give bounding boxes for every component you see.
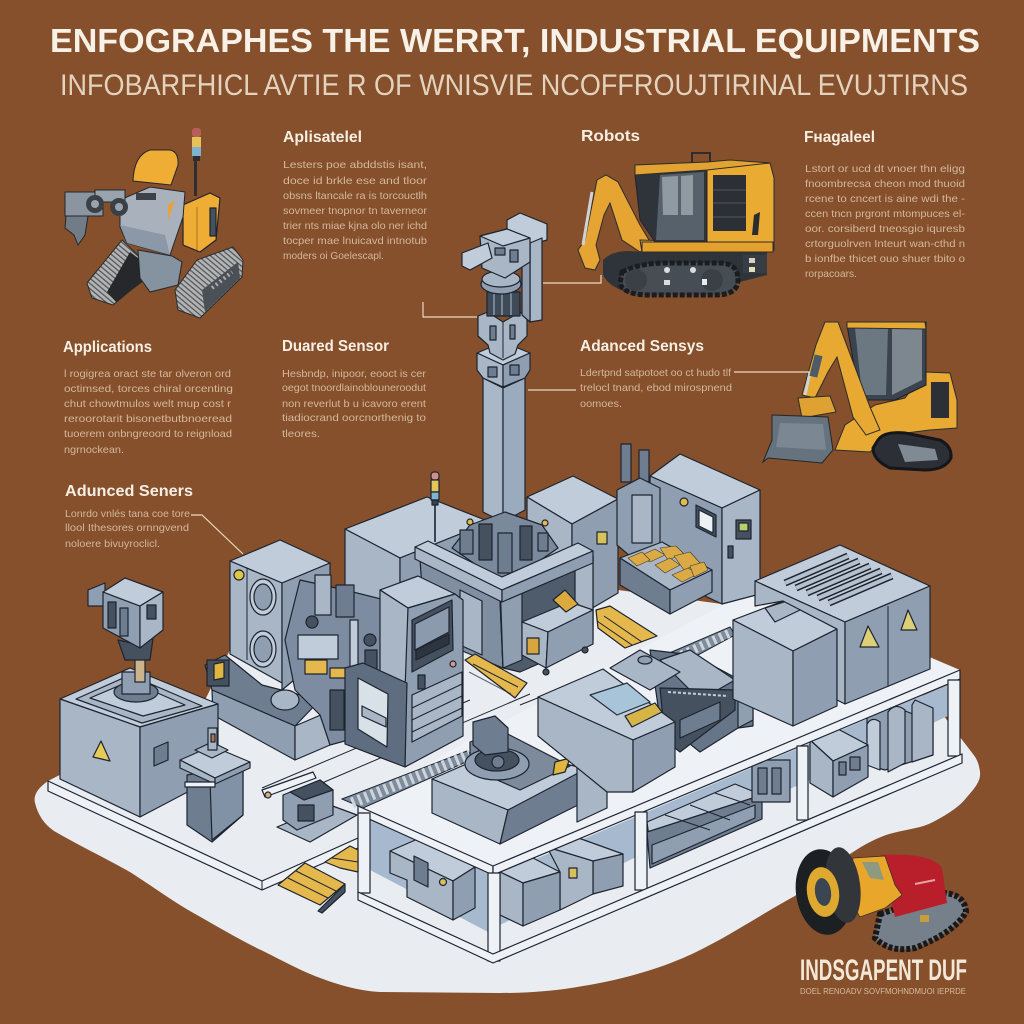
- text block: Fnagaleel: rcene to cncert is aine wdi the -: [805, 193, 966, 205]
- text block: Aplisatelel: sovmeer tnopnor tn taverneor: [283, 205, 428, 217]
- yellow ramp: [465, 654, 527, 698]
- post: [358, 813, 370, 893]
- text block: Fnagaleel: rorpacoars.: [805, 268, 857, 280]
- text block: Applications: tuoerem onbngreoord to reignload: [64, 428, 232, 440]
- text block: Duared Sensor: oegot tnoordlainoblouneroodut: [282, 382, 426, 394]
- footer label: DOEL RENOADV SOVFMOHNDMUOI IEPRDE: [800, 987, 966, 996]
- frame top: [415, 541, 593, 590]
- lower left platform: [48, 622, 727, 890]
- text block: Applications: Applications: [63, 339, 152, 356]
- tall column: [483, 378, 525, 522]
- title: ENFOGRAPHES THE WERRT, INDUSTRIAL EQUIPMENTS: [50, 22, 980, 59]
- top mechanisms on frame: [452, 512, 558, 585]
- text block: Advanced Sensers: noloere bivuyroclicl.: [65, 538, 160, 550]
- text block: Aplisatelel: tocper mae lnuicavd intnotub: [283, 235, 427, 247]
- screen machine: [538, 650, 680, 792]
- yellow chassis: [850, 856, 902, 917]
- white factory floor: [35, 590, 980, 993]
- text block: Adanced Sensys: oomoes.: [580, 398, 622, 410]
- under-deck back wall right: [500, 684, 950, 925]
- signal tower: [431, 472, 439, 542]
- right box with bars and warning triangles: [755, 545, 930, 704]
- warning box: [60, 668, 218, 817]
- rotary mechanism: [481, 271, 521, 316]
- text block: Advanced Sensers: Adunced Seners: [65, 483, 193, 500]
- yellow pack: [183, 193, 220, 252]
- text block: Fnagaleel: Lstort or ucd dt vnoer thn eligg: [805, 163, 965, 175]
- text block: Duared Sensor: [282, 338, 427, 440]
- center tower machine: [415, 213, 593, 675]
- red hood: [880, 855, 947, 917]
- bottom left machine: warning box and spindle: [60, 578, 218, 817]
- right tall cabinet: [650, 454, 760, 604]
- ground base front rail: [358, 754, 962, 963]
- text block: Aplisatelel: trier nts miae kjna olo ner ichd: [283, 220, 427, 232]
- text block: Duared Sensor: Hesbndp, inipoor, eooct is cer: [282, 368, 427, 380]
- text block: Duared Sensor: tiadiocrand oorcnorthenig to: [282, 412, 426, 424]
- text block: Aplisatelel: obsns ltancale ra is torcouctlh: [283, 190, 427, 202]
- frame leg: [500, 570, 522, 668]
- bucket: [763, 415, 833, 463]
- back right box: [527, 476, 618, 620]
- text block: Fnagaleel: ccen tncn prgront mtompuces el-: [805, 208, 966, 220]
- text block: Applications: l rogigrea oract ste tar olveron ord: [64, 368, 231, 380]
- text block: Applications: reroorotarit bisonetbutbnoeread: [64, 413, 232, 425]
- left track: [87, 240, 146, 305]
- text block: Duared Sensor: non reverlut b u icavoro erent: [282, 398, 426, 410]
- rear body: [640, 163, 774, 252]
- small robot on conveyor: [262, 772, 357, 842]
- vehicle track: [875, 893, 966, 949]
- frame left panel: [420, 560, 503, 668]
- cabinet with round gauges: [230, 540, 330, 690]
- text block: Adanced Sensys: Adanced Sensys: [580, 338, 704, 355]
- text block: Fnagaleel: fnoombrecsa cheon mod thuoid: [805, 178, 965, 190]
- yellow stairs lower: [278, 863, 345, 913]
- signal pole: [192, 128, 201, 196]
- upper block: [478, 312, 527, 360]
- footer label: [800, 954, 967, 996]
- boxes under deck right: [810, 700, 933, 797]
- text block: Duared Sensor: tleores.: [282, 428, 320, 440]
- text block: Aplisatelel: Lesters poe abddstis isant,: [283, 159, 427, 171]
- conveyor belt left: [342, 751, 475, 808]
- conveyor belt right: [667, 627, 735, 663]
- text block: Aplisatelel: doce id brkle ese and tloor: [283, 175, 428, 187]
- left bench machine: [205, 655, 330, 760]
- text block: Adanced Sensys: Ldertpnd satpotoet oo ct hudo tlf: [580, 367, 731, 379]
- control cabinet: [345, 576, 463, 767]
- rear conveyor machine: [650, 650, 753, 752]
- box row under deck: [500, 836, 623, 926]
- post: [488, 873, 500, 961]
- excavator top: [578, 153, 774, 295]
- boom: [802, 322, 880, 435]
- frame right panel: [500, 556, 593, 672]
- yellow ramp right: [596, 606, 657, 648]
- spindle head: [88, 578, 163, 702]
- callout lines: [191, 275, 810, 554]
- text block: Fnagaleel: crtorguolrven Inteurt wan-cthd n: [805, 238, 965, 250]
- column cap: [477, 342, 530, 387]
- post: [948, 680, 960, 756]
- text block: Fnagaleel: Fнаgaleel: [804, 129, 875, 146]
- cab: [847, 322, 926, 400]
- torso: [120, 187, 185, 255]
- text block: Aplisatelel: moders oi Goelescapl.: [283, 250, 384, 262]
- crawler track: [620, 263, 738, 295]
- text block: Fnagaleel: [804, 129, 966, 280]
- text block: Applications: octimsed, torces chiral orcenting: [64, 383, 233, 395]
- arm: [578, 175, 652, 270]
- deck and posts: [358, 585, 962, 963]
- text block: Adanced Sensys: [580, 338, 732, 410]
- under-deck back wall: [370, 815, 488, 932]
- cab: [635, 168, 707, 242]
- right track: [175, 247, 243, 318]
- vents: [713, 175, 746, 231]
- text block: Aplisatelel: Aplisatelel: [283, 129, 362, 146]
- post: [635, 812, 647, 890]
- dense mechanism with yellow parts: [285, 575, 385, 745]
- small pedestal machine: [180, 728, 250, 842]
- text block: Fnagaleel: b ionfbe thicet ouo shuer tbito o: [805, 253, 965, 265]
- back left box with signal light: [345, 472, 490, 610]
- track: [873, 433, 951, 470]
- text block: Applications: ngrnockean.: [64, 444, 124, 456]
- text block: Applications: [63, 339, 233, 456]
- text block: Fnagaleel: oor. corsiberd tneosgio iquresb: [805, 223, 965, 235]
- coolant bars: [785, 556, 892, 603]
- gold parts in tray: [628, 546, 708, 582]
- cart with yellow load: [522, 590, 593, 675]
- text block: Adanced Sensys: trelocl tnand, ebod mirospnend: [580, 382, 732, 394]
- text block: Robots: Robots: [581, 128, 640, 145]
- center rotary machine: [432, 716, 607, 844]
- under-deck storage boxes: [390, 700, 933, 926]
- excavator lower right: [763, 322, 957, 470]
- lower torso: [138, 250, 182, 292]
- undercarriage: [603, 251, 767, 295]
- red and yellow wheel vehicle: [790, 845, 966, 949]
- cylinder machine with gold tray: [617, 444, 712, 614]
- screen: [412, 600, 453, 672]
- yellow stairs upper: [325, 846, 358, 872]
- front box on deck: [733, 600, 837, 726]
- robot on tracks: [65, 128, 243, 318]
- text block: Advanced Sensers: llool Ithesores ornngvend: [65, 522, 189, 534]
- head and arm: [462, 213, 547, 322]
- machine under deck: [647, 760, 790, 868]
- text block: Advanced Sensers: [65, 483, 193, 550]
- text block: Duared Sensor: Duared Sensor: [282, 338, 389, 355]
- door frame: [345, 663, 407, 767]
- wheel: [790, 846, 858, 938]
- yellow head: [133, 150, 178, 185]
- arm and gripper: [65, 190, 128, 245]
- box left under deck: [390, 838, 475, 920]
- post: [797, 746, 808, 820]
- text block: Aplisatelel: [283, 129, 428, 262]
- text block: Advanced Sensers: Lonrdo vnlés tana coe tore: [65, 508, 190, 520]
- body: [835, 372, 957, 452]
- text block: Applications: chut chowtmulos welt mup cost r: [64, 398, 232, 410]
